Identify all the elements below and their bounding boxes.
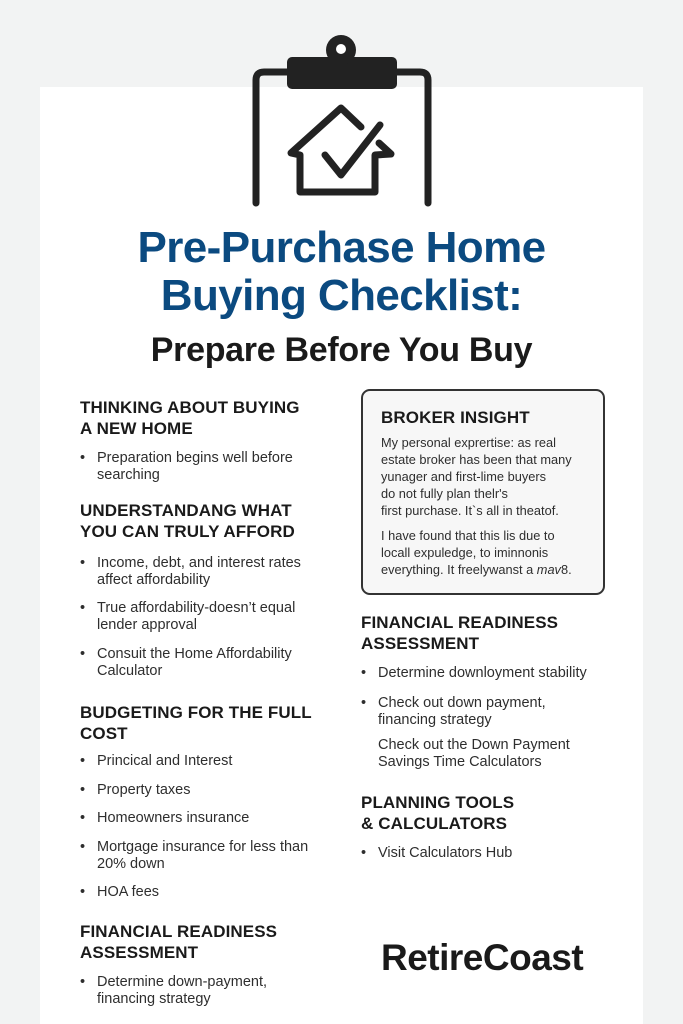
section: financial readiness right: FINANCIAL READINESS [361,613,558,632]
section: financial readiness right: Check out down payment, [378,695,546,711]
section: budgeting: COST [80,724,128,742]
section: afford: affect affordability [97,572,210,588]
callout: broker insight: yunager and first-lime buyers [381,469,546,484]
section: budgeting: BUDGETING FOR THE FULL [80,703,312,722]
callout: broker insight: everything. It freelywanst a mav8. [381,562,572,577]
section: financial readiness left [80,922,277,1007]
section: afford: Income, debt, and interest rates [97,555,301,571]
section: thinking about buying: THINKING ABOUT BUYING [80,398,300,417]
section: afford: UNDERSTANDANG WHAT [80,501,292,520]
section: budgeting: Mortgage insurance for less than [97,839,308,855]
title: Buying Checklist: [161,271,522,320]
callout: broker insight: estate broker has been that many [381,452,572,467]
section: thinking about buying: A NEW HOME [80,418,193,438]
subtitle: Prepare Before You Buy [151,331,532,369]
callout: broker insight: My personal exprertise: as real [381,435,556,450]
callout: broker insight: locall expuledge, to iminnonis [381,545,548,560]
section: financial readiness right: financing strategy [378,712,492,728]
callout: broker insight: I have found that this lis due to [381,528,555,543]
icon: clipboard with house checkmark [252,35,432,206]
section: budgeting: Property taxes [97,782,190,798]
section: financial readiness right: Determine downloyment stability [378,665,587,681]
section: financial readiness left: ASSESSMENT [80,942,198,962]
section: financial readiness right [361,613,587,770]
section: financial readiness right: ASSESSMENT [361,634,479,652]
section: afford: Calculator [97,663,162,679]
logo: RetireCoast: RetireCoast [381,937,583,978]
section: afford: YOU CAN TRULY AFFORD [80,522,295,540]
callout: broker insight [361,389,605,595]
section: thinking about buying [80,398,300,483]
callout: broker insight: do not fully plan thelr's [381,486,508,501]
section: afford: lender approval [97,617,197,633]
title: Pre-Purchase Home [138,223,545,272]
section: financial readiness right: Savings Time Calculators [378,754,542,770]
section: afford [80,501,301,679]
section: budgeting: 20% down [97,856,165,872]
callout: broker insight: BROKER INSIGHT [381,408,530,427]
section: budgeting: Homeowners insurance [97,810,249,826]
section: financial readiness right: Check out the Down Payment [378,737,570,753]
section: planning tools [361,793,514,861]
section: thinking about buying: searching [97,467,160,483]
section: afford: True affordability-doesn’t equal [97,600,295,616]
section: budgeting: HOA fees [97,884,159,900]
section: financial readiness left: Determine down-payment, [97,974,267,990]
section: planning tools: PLANNING TOOLS [361,793,514,812]
section: budgeting: Princical and Interest [97,753,232,769]
section: afford: Consuit the Home Affordability [97,646,292,662]
section: thinking about buying: Preparation begins well before [97,450,293,466]
section: planning tools: Visit Calculators Hub [378,845,512,861]
section: budgeting [80,703,312,900]
section: planning tools: & CALCULATORS [361,814,507,832]
title [138,223,545,320]
section: financial readiness left: financing strategy [97,991,211,1007]
callout: broker insight: first purchase. It`s all in theatof. [381,503,559,518]
section: financial readiness left: FINANCIAL READINESS [80,922,277,941]
